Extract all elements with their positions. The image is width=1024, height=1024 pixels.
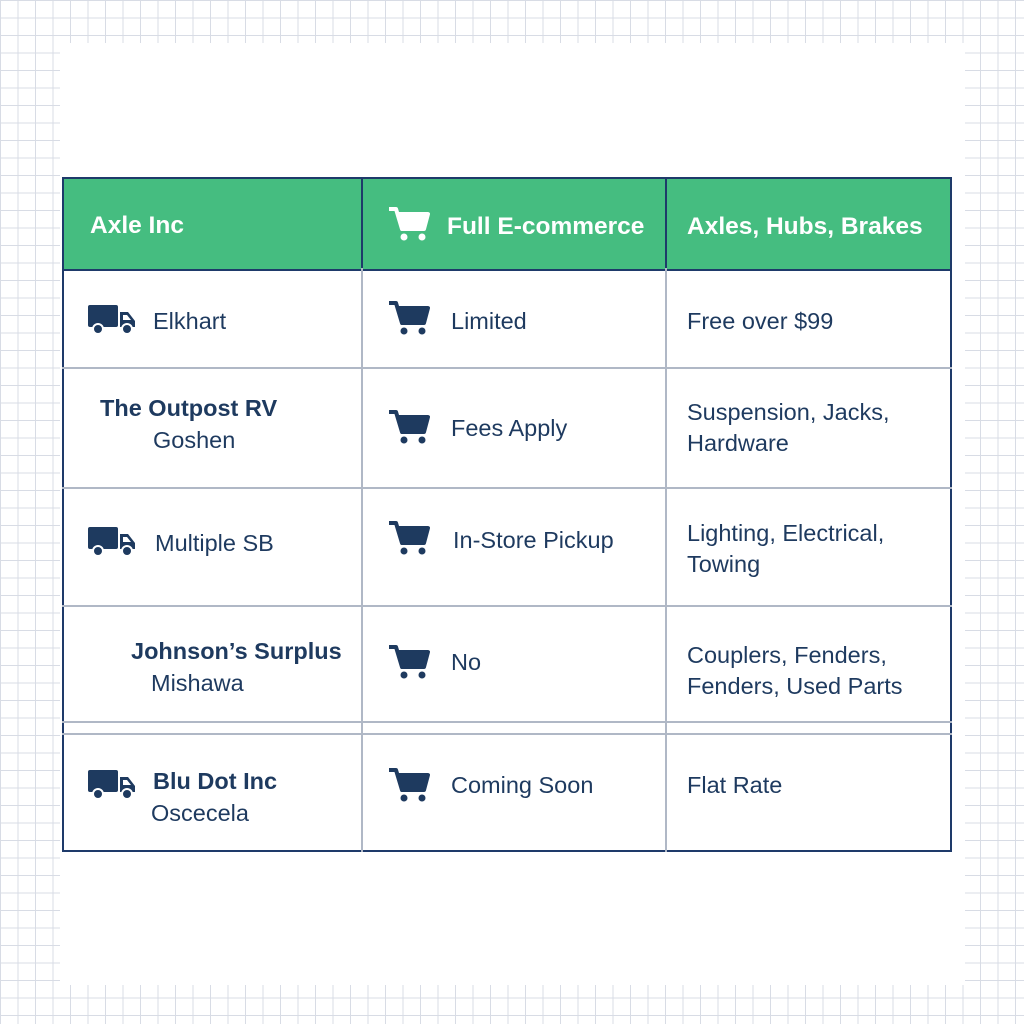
text: In-Store Pickup	[453, 527, 614, 553]
text: Blu Dot Inc	[153, 768, 277, 794]
text: Coming Soon	[451, 772, 593, 798]
text: Couplers, Fenders,	[687, 642, 887, 668]
text: Multiple SB	[155, 530, 274, 556]
text: Full E-commerce	[447, 213, 644, 240]
text: Fees Apply	[451, 415, 567, 441]
text: Hardware	[687, 430, 789, 456]
row 5	[88, 770, 135, 798]
text: Free over $99	[687, 308, 833, 334]
row 1	[88, 305, 135, 333]
text: Mishawa	[151, 670, 244, 696]
text: Fenders, Used Parts	[687, 673, 903, 699]
header: Axle Inc: Axle Inc	[90, 212, 184, 239]
text: Oscecela	[151, 800, 249, 826]
header: Full E-commerce	[389, 207, 430, 240]
table	[62, 177, 952, 852]
text: No	[451, 649, 481, 675]
text: Towing	[687, 551, 760, 577]
text: Flat Rate	[687, 772, 782, 798]
header: Axles, Hubs, Brakes: Axles, Hubs, Brakes	[687, 213, 923, 240]
row 4: Johnson’s Surplus	[131, 638, 342, 664]
text: Elkhart	[153, 308, 226, 334]
header row	[64, 179, 950, 271]
row 3	[88, 527, 135, 555]
text: Lighting, Electrical,	[687, 520, 884, 546]
text: Limited	[451, 308, 527, 334]
text: Suspension, Jacks,	[687, 399, 889, 425]
row 2: The Outpost RV	[100, 395, 277, 421]
text: Goshen	[153, 427, 235, 453]
